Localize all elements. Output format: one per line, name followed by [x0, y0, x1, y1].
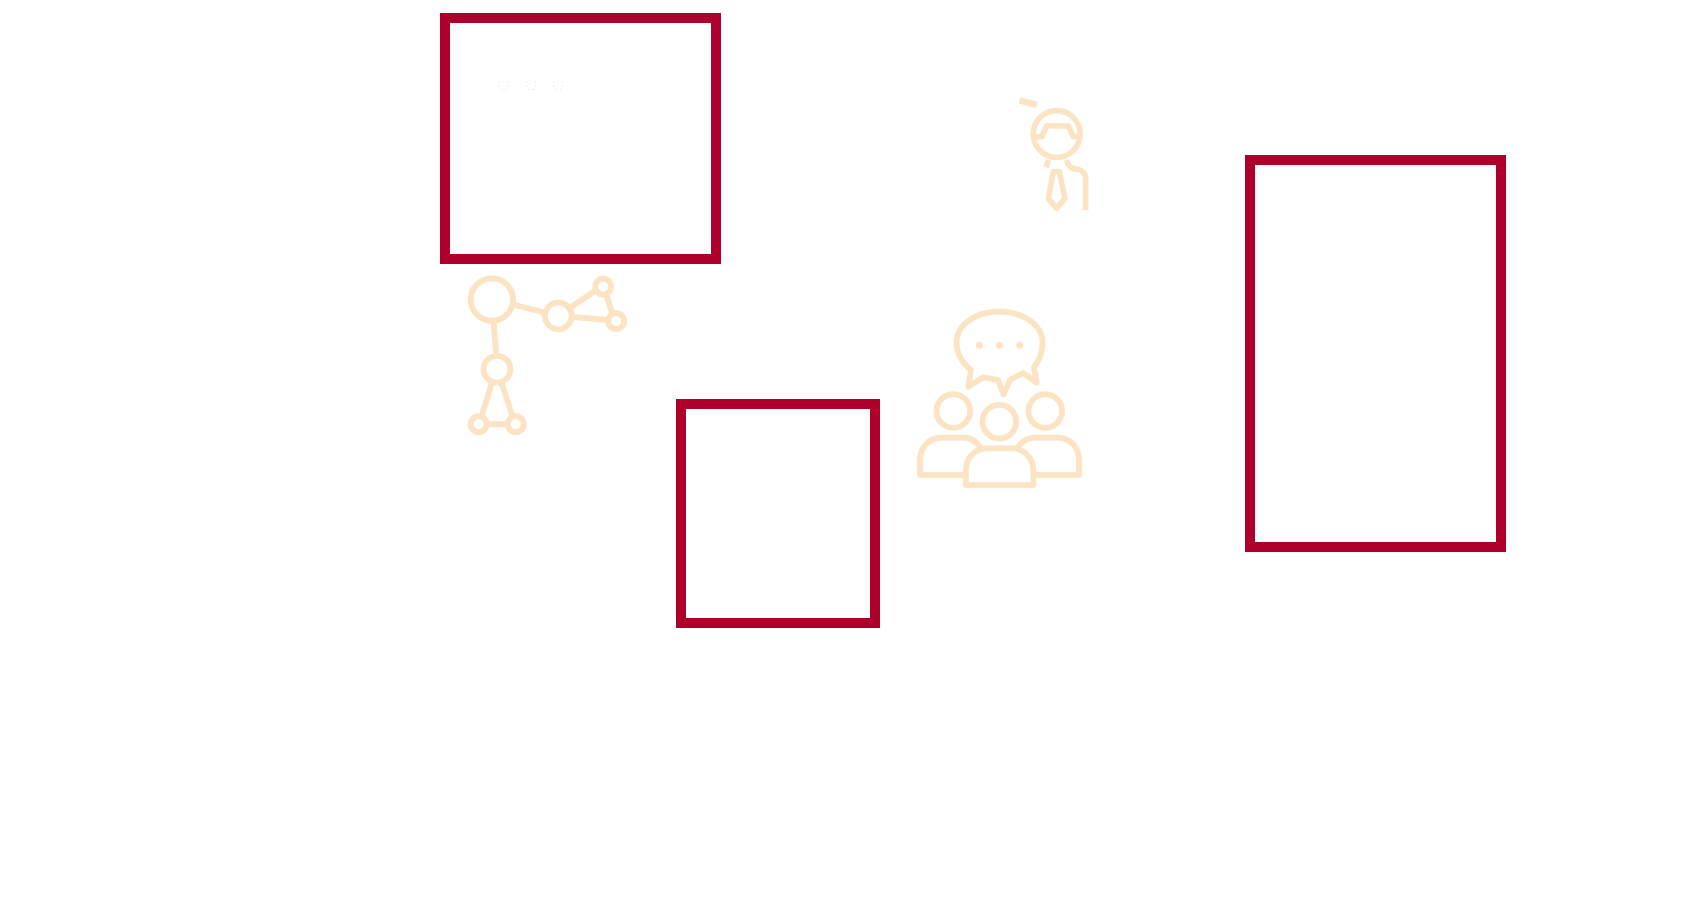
speech dots [976, 342, 1023, 349]
front person [966, 405, 1033, 485]
speech bubble [956, 312, 1042, 394]
icon: network nodes [471, 278, 624, 432]
left person [920, 394, 980, 475]
icon: three faint dots [499, 80, 563, 90]
panel: centre frame [681, 404, 875, 623]
icon: person with tie [1020, 100, 1086, 210]
panel: right frame [1250, 160, 1501, 547]
right person [1018, 394, 1079, 475]
panel: top left frame [445, 18, 716, 259]
icon: group with speech bubble [920, 312, 1079, 485]
